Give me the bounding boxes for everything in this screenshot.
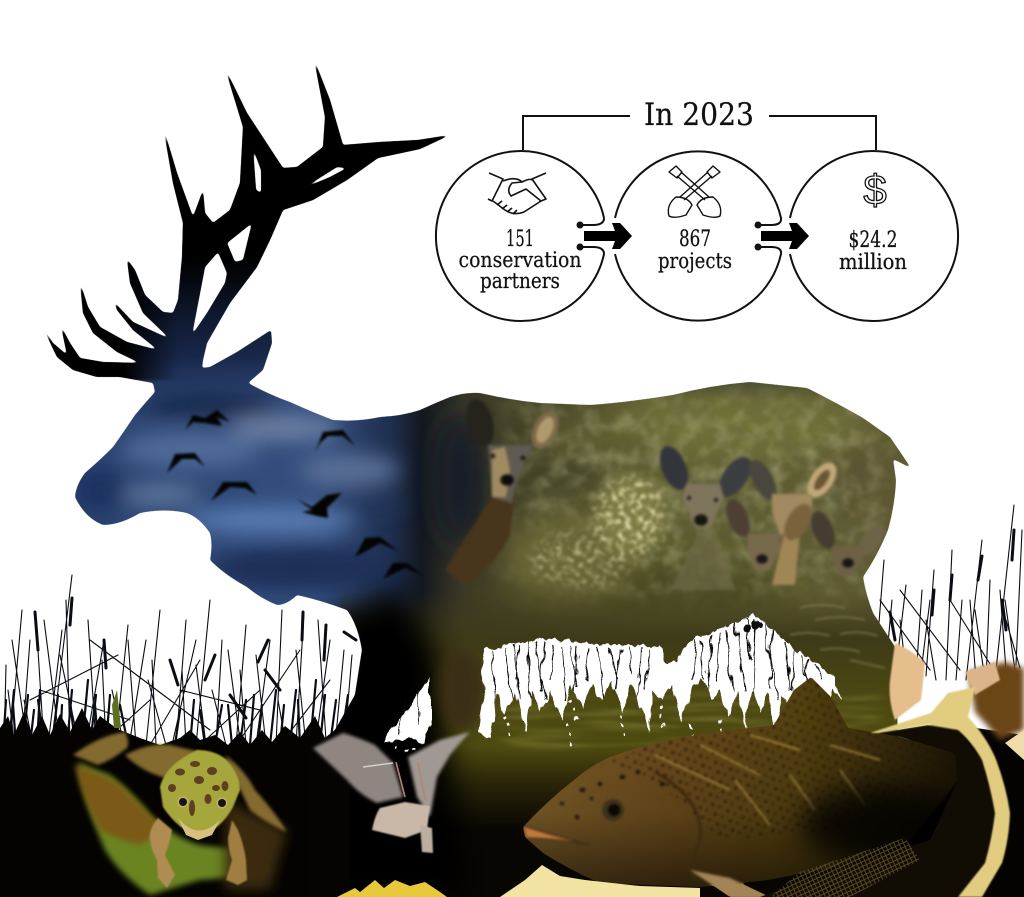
panel: funding: $24.2 (848, 228, 898, 253)
head spots (560, 770, 665, 819)
frog on a green leaf (73, 690, 287, 895)
panel: projects: projects (658, 249, 732, 273)
right edge finger (1005, 730, 1024, 760)
landing net (760, 643, 1024, 897)
black fade at the antlers (46, 65, 819, 395)
heading: In 2023 with bracket: In 2023 (644, 97, 754, 133)
grass: right meadow silhouette (860, 505, 1022, 680)
shrub (498, 468, 672, 604)
spots (600, 677, 950, 840)
lower shade (523, 725, 958, 887)
panel: conservation partners (436, 151, 604, 321)
arrow: partners to projects (584, 223, 632, 249)
panel: projects (615, 151, 781, 321)
heading: In 2023 with bracket (523, 97, 876, 150)
arrow: projects to funding (761, 223, 809, 249)
deer: fawn group on the right (654, 442, 890, 590)
icon: handshake (488, 173, 546, 214)
body (523, 677, 958, 887)
elk silhouette filled with habitat scenes (46, 65, 909, 824)
highlights (655, 735, 880, 825)
deer: adult on the left (445, 397, 564, 585)
net interior (760, 725, 995, 897)
bat in flight (313, 732, 470, 853)
cream coral under the trout (500, 865, 700, 897)
eye (602, 799, 624, 821)
mouth (524, 826, 590, 845)
hind legs (73, 732, 287, 832)
head and back (160, 750, 240, 837)
grass: left meadow silhouette (3, 575, 356, 750)
front legs (150, 818, 175, 888)
dark front leg shading (316, 579, 466, 830)
gill plate (655, 772, 700, 880)
panel: conservation partners: 151 (506, 227, 534, 252)
panel: conservation partners: conservation (458, 248, 582, 272)
foliage mottling (502, 386, 896, 600)
trout (523, 677, 970, 897)
rear shadow (800, 785, 970, 865)
lily leaf (78, 762, 270, 895)
panel: projects: 867 (679, 227, 711, 252)
white belly gap with reflected grass (383, 615, 842, 752)
panel: funding (790, 151, 958, 321)
net rim (870, 687, 1010, 897)
woodland colour masses (432, 390, 890, 620)
reed (112, 690, 121, 728)
water ripples (790, 605, 885, 668)
water below the body (340, 590, 940, 897)
panel: funding: million (839, 250, 907, 274)
yellow coral (337, 880, 447, 897)
ground: dark tufted earth (0, 708, 1024, 897)
panel: conservation partners: partners (480, 269, 560, 293)
icon: crossed shovels (668, 166, 721, 217)
hand behind the net (890, 643, 925, 720)
storm sky light patches (74, 393, 410, 590)
icon: dollar sign: $ (863, 166, 887, 213)
sky and woodland base of the body (46, 65, 909, 737)
pectoral fin (690, 870, 770, 897)
birds in flight (167, 410, 423, 579)
